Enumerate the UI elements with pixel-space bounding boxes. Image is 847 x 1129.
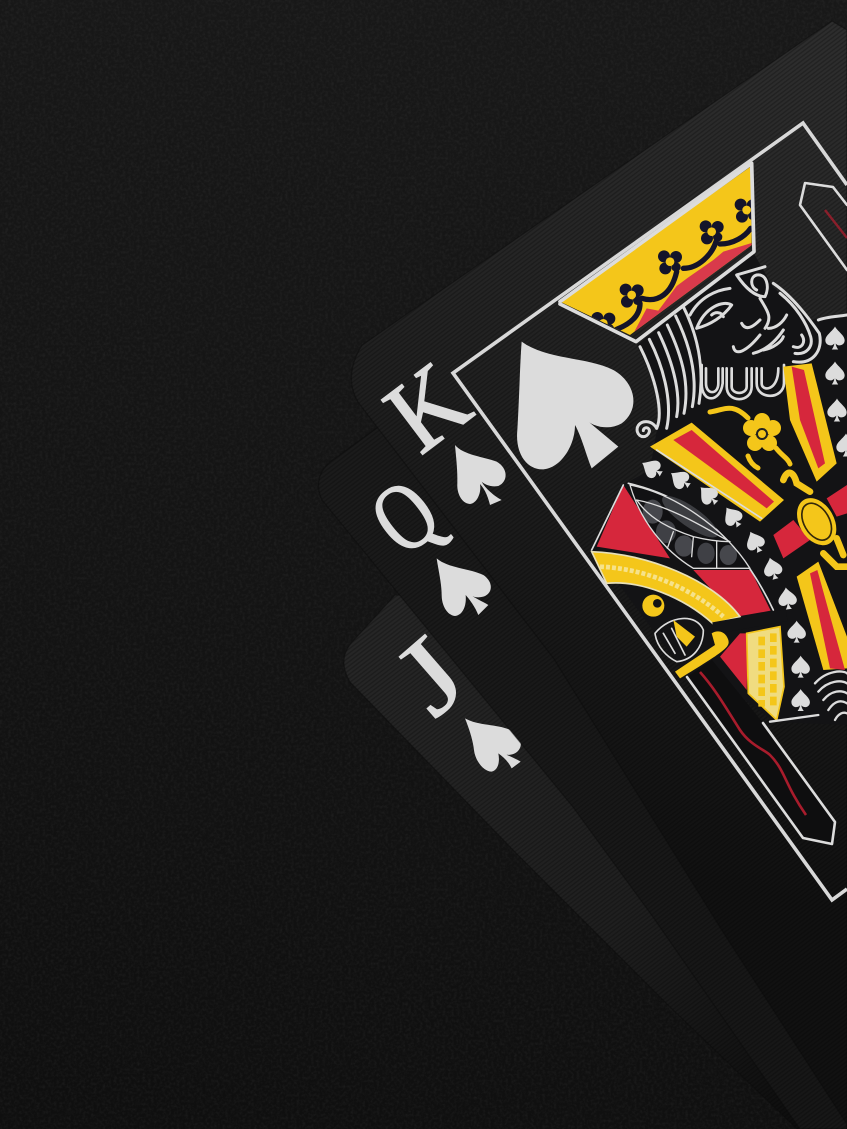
jack letter: J <box>371 614 489 738</box>
jack of spades card <box>344 595 847 1129</box>
figure dark background <box>592 252 847 725</box>
crown <box>560 163 759 342</box>
shoulder red cape <box>592 483 773 617</box>
lower right sash <box>797 562 847 670</box>
central yellow flower <box>710 408 790 468</box>
yellow patterned skirt <box>747 627 784 720</box>
body and robes, zoom coordinates <box>592 363 847 722</box>
yellow key pattern band <box>592 552 740 624</box>
hand and sword hilt <box>642 595 729 678</box>
jack small spade <box>465 718 521 772</box>
robe small spades <box>638 455 810 711</box>
lower sword <box>687 660 835 844</box>
beard <box>702 365 784 399</box>
right hair curls <box>773 283 847 362</box>
king of spades card <box>351 21 847 1129</box>
sword bar <box>713 615 787 628</box>
king letter: K <box>364 339 490 474</box>
crown and head, zoom coordinates <box>560 163 847 437</box>
central cross and gem <box>773 473 847 567</box>
scaled pauldron <box>630 485 750 568</box>
lower red cape <box>720 633 748 690</box>
card inner frame <box>453 123 847 900</box>
queen small spade <box>437 558 491 616</box>
upper left sash <box>650 423 784 522</box>
upper right sash <box>783 363 837 482</box>
upper sword <box>800 183 847 270</box>
hair on the left <box>637 307 701 437</box>
right column spades near collar <box>825 326 847 456</box>
mirrored beard lines <box>770 671 847 722</box>
king face lines <box>690 267 787 353</box>
king small spade <box>455 445 506 505</box>
queen letter: Q <box>350 457 458 575</box>
big spade <box>517 342 633 469</box>
queen of spades card <box>318 427 847 1129</box>
